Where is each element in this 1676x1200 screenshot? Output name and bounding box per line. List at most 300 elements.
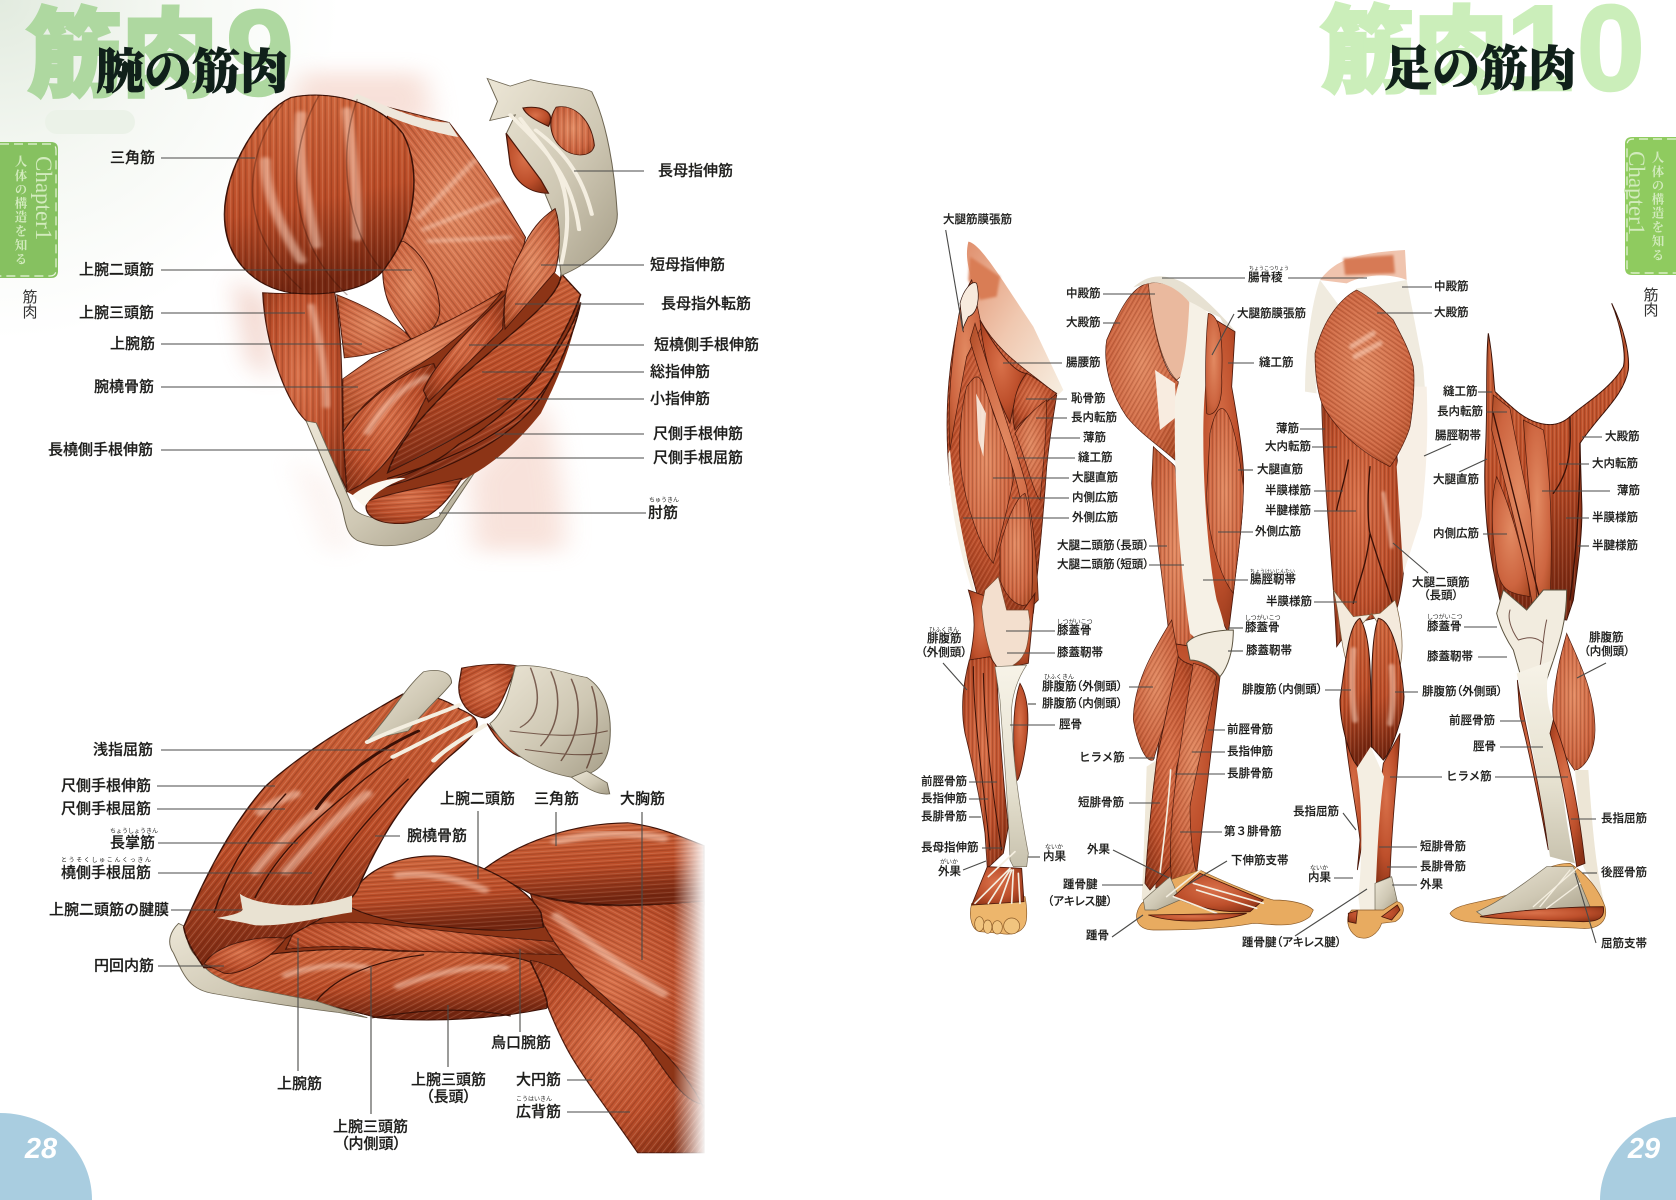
label 腓腹筋（外側頭） front: [921, 627, 967, 690]
label 半膜様筋 back: [1265, 483, 1343, 497]
page number 28: [0, 1113, 92, 1200]
label 内果 back: [1308, 865, 1353, 884]
label 膝蓋骨 front: しつがいこつ: [1057, 618, 1093, 626]
ankle and instep: [972, 852, 1024, 905]
label 長母指外転筋: 長母指外転筋: [661, 296, 751, 312]
label 長内転筋 inner: [1437, 404, 1507, 418]
label 中殿筋 back: 中殿筋: [1434, 279, 1468, 293]
label 膝蓋靭帯 front: [1007, 645, 1103, 659]
label 踵骨腱（アキレス腱）: （アキレス腱）: [1048, 894, 1112, 908]
extensor carpi radialis brevis: [423, 295, 505, 402]
label 円回内筋: [94, 958, 224, 974]
label 腸脛靭帯 side: ちょうけいじんたい: [1250, 569, 1295, 575]
shin muscles: [963, 657, 1008, 868]
label 短腓骨筋 back: 短腓骨筋: [1420, 839, 1466, 853]
label 短腓骨筋 side: 短腓骨筋: [1078, 795, 1124, 809]
deltoid: [485, 823, 704, 905]
illustration: leg side view: [1106, 276, 1313, 930]
label 肘筋: 肘筋: [648, 504, 678, 522]
label 半腱様筋 inner: [1578, 538, 1638, 552]
label 長腓骨筋 side: 長腓骨筋: [1227, 766, 1273, 780]
peroneal side: [1145, 657, 1200, 890]
label 脛骨 front: 脛骨: [1059, 718, 1082, 731]
label 長指伸筋 front: [921, 791, 988, 805]
pronator: [204, 937, 286, 974]
pectineus: [1013, 373, 1057, 430]
label 肘筋: [439, 497, 679, 522]
label 長内転筋: [1036, 410, 1117, 424]
fade to white at torso edge: [673, 816, 707, 1156]
label 恥骨筋: [1026, 391, 1106, 405]
label 上腕二頭筋 top: [440, 790, 515, 879]
label 大腿筋膜張筋 side: 大腿筋膜張筋: [1237, 306, 1306, 320]
title: 足の筋肉: 足の筋肉: [1384, 43, 1576, 96]
vastus lateralis side: [1207, 409, 1243, 593]
label 尺側手根伸筋: 尺側手根伸筋: [653, 426, 743, 442]
label 腓腹筋（外側頭） side: ひふくきん: [1044, 674, 1074, 681]
right chapter tab: Chapter1: [1624, 151, 1649, 235]
anconeus: [366, 478, 462, 524]
label 縫工筋 inner: 縫工筋: [1443, 384, 1478, 398]
fascia sheet: [967, 242, 1063, 397]
label 後脛骨筋: 後脛骨筋: [1601, 865, 1647, 879]
faint pill under heading: [45, 110, 135, 134]
label 長母指伸筋 front: [921, 840, 1003, 854]
label 大内転筋 inner: [1559, 456, 1638, 470]
label 踵骨腱（アキレス腱）: [1048, 877, 1143, 908]
label 縫工筋: 縫工筋: [1078, 450, 1112, 464]
foot sole muscle: [1480, 907, 1604, 922]
label 外果 front: 外果: [938, 864, 961, 878]
soleus right: [1375, 733, 1400, 883]
label 膝蓋骨 side: 膝蓋骨: [1245, 620, 1280, 634]
label 三角筋 top: [534, 790, 579, 846]
soleus left: [1345, 733, 1364, 870]
label 前脛骨筋 inner: 前脛骨筋: [1449, 713, 1495, 727]
label 長指伸筋 front: 長指伸筋: [921, 791, 967, 805]
label 上腕二頭筋の腱膜: 上腕二頭筋の腱膜: [49, 900, 169, 918]
label 踵骨腱（アキレス腱）: 踵骨腱: [1063, 877, 1098, 891]
label 大殿筋 inner: [1582, 429, 1640, 443]
label ヒラメ筋 side: ヒラメ筋: [1079, 750, 1125, 764]
gluteus maximus side: [1106, 283, 1178, 460]
label 内果 front: ないか: [1045, 844, 1063, 851]
label 外側広筋: 外側広筋: [1072, 510, 1118, 524]
label 大腿二頭筋（短頭）: 大腿二頭筋（短頭）: [1057, 557, 1149, 571]
hip upper: [1320, 250, 1407, 283]
toes: [975, 917, 1020, 934]
label 大腿直筋 inner: 大腿直筋: [1433, 472, 1479, 486]
tibialis anterior inner: [1517, 680, 1548, 850]
title: 腕の筋肉: 腕の筋肉: [96, 46, 288, 99]
right vertical section label: 筋肉: [1642, 287, 1658, 317]
label 腸腰筋: 腸腰筋: [1066, 355, 1100, 369]
label 大円筋: 大円筋: [516, 1072, 561, 1088]
label 長掌筋: ちょうしょうきん: [110, 828, 158, 835]
label 膝蓋骨 side: [1228, 614, 1281, 634]
left vertical section label: 筋肉: [20, 289, 38, 319]
label 大腿直筋 side: [1238, 462, 1303, 476]
label 腓腹筋（内側頭） front: 腓腹筋（内側頭）: [1042, 696, 1122, 710]
label 長腓骨筋 back: 長腓骨筋: [1420, 859, 1466, 873]
label 短母指伸筋: 短母指伸筋: [650, 256, 725, 274]
label 腸骨稜: [1162, 266, 1367, 284]
callouts: legs lower: [921, 613, 1647, 950]
thigh inner: [1485, 303, 1629, 620]
knee bone: [1187, 630, 1233, 677]
thumb abductor: [504, 209, 559, 329]
label 腸腰筋: [1003, 355, 1100, 369]
label 外果 front: [938, 858, 986, 878]
label 薄筋 back: [1276, 421, 1325, 435]
label 腸脛靭帯 side: [1203, 569, 1296, 586]
achilles back: [1357, 747, 1384, 910]
fist: [490, 666, 610, 777]
iliac crest: [1133, 276, 1235, 342]
tibia inner: [1517, 660, 1575, 863]
label 大腿直筋: 大腿直筋: [1072, 470, 1118, 484]
forearm base: [343, 272, 581, 503]
label 踵骨: 踵骨: [1086, 928, 1109, 942]
hand bones: [487, 78, 617, 276]
dorsal foot muscles: [1173, 873, 1263, 912]
foot tendons inner: [1533, 868, 1580, 908]
label 三角筋: 三角筋: [110, 150, 155, 166]
foot inner: [1450, 863, 1606, 929]
label 烏口腕筋: 烏口腕筋: [491, 1034, 551, 1052]
label 大殿筋 back: [1377, 305, 1468, 319]
label 上腕三頭筋（長頭）: [411, 1005, 486, 1106]
label 前脛骨筋 front: [921, 774, 997, 788]
label 長腓骨筋 front: [921, 809, 981, 823]
label 前脛骨筋 side: 前脛骨筋: [1227, 722, 1273, 736]
label 広背筋: こうはいきん: [516, 1096, 552, 1103]
label 短橈側手根伸筋: 短橈側手根伸筋: [654, 336, 759, 354]
label 上腕三頭筋（長頭）: （長頭）: [426, 1088, 471, 1106]
label 腓腹筋（外側頭） back: 腓腹筋（外側頭）: [1422, 684, 1502, 698]
label 上腕筋: 上腕筋: [277, 1076, 322, 1092]
callouts: arm top view: [48, 150, 759, 522]
right page header: big green heading 筋肉10: 筋肉: [1320, 0, 1508, 104]
gluteus medius side: [1148, 283, 1190, 380]
tibialis side: [1170, 663, 1217, 880]
knee inner: [1497, 590, 1567, 680]
sartorius: [970, 323, 1038, 607]
label 外果 front: がいか: [940, 858, 958, 866]
thigh base: [947, 280, 1057, 613]
label 浅指屈筋: 浅指屈筋: [93, 742, 153, 758]
heel muscle lumps: [1348, 905, 1400, 923]
label 大腿二頭筋（長頭） back: （長頭）: [1424, 589, 1458, 602]
label 腓腹筋（内側頭） inner: [1577, 630, 1630, 678]
label 大殿筋: [1066, 315, 1120, 329]
label 半膜様筋 lower: 半膜様筋: [1266, 594, 1312, 608]
label 腓腹筋（外側頭） side: [1042, 674, 1153, 693]
brachialis: [286, 922, 566, 955]
foot bones: [1477, 867, 1590, 917]
label 長掌筋: [110, 828, 298, 852]
label 大腿筋膜張筋: 大腿筋膜張筋: [943, 212, 1012, 226]
label 膝蓋骨 inner: [1427, 613, 1497, 633]
label 長指伸筋 side: 長指伸筋: [1227, 744, 1273, 758]
triceps: [263, 291, 347, 490]
label 踵骨腱（アキレス腱） back: [1242, 889, 1367, 949]
sartorius inner: [1492, 395, 1547, 610]
label 半膜様筋 inner: [1566, 510, 1638, 524]
left chapter tab: [0, 142, 58, 278]
label 屈筋支帯: [1575, 873, 1647, 950]
label 長指屈筋 back: [1293, 804, 1356, 830]
label 下伸筋支帯: [1187, 853, 1288, 885]
label 膝蓋骨 inner: 膝蓋骨: [1427, 619, 1462, 633]
label 大腿直筋 side: 大腿直筋: [1257, 462, 1303, 476]
left page header: big green heading 筋肉9: [26, 0, 294, 121]
knee side muscle right: [1013, 593, 1035, 667]
tibia: [995, 665, 1028, 867]
label 腓腹筋（内側頭） inner: （内側頭）: [1584, 644, 1630, 658]
illustration: arm bottom view: [170, 664, 707, 1156]
label 半膜様筋 inner: 半膜様筋: [1592, 510, 1638, 524]
label 内果 front: 内果: [1043, 849, 1066, 863]
label 上腕三頭筋（長頭）: 上腕三頭筋: [411, 1072, 486, 1088]
wrist tendons: [510, 115, 592, 264]
label 長母指伸筋 front: 長母指伸筋: [921, 840, 978, 854]
forearm tendons: [367, 705, 485, 761]
label 大腿二頭筋（長頭）: 大腿二頭筋（長頭）: [1057, 538, 1149, 552]
callouts: arm bottom view: [49, 742, 665, 1152]
deltoid: [224, 95, 414, 294]
label 腓腹筋（外側頭） back: [1395, 684, 1502, 698]
label 薄筋: 薄筋: [1083, 430, 1106, 444]
label 脛骨 inner: [1473, 740, 1543, 753]
calf medial: [1014, 683, 1028, 781]
label 膝蓋骨 front: [1006, 618, 1093, 637]
label 膝蓋靭帯 inner: 膝蓋靭帯: [1427, 649, 1473, 663]
callouts: legs upper: [943, 212, 1640, 608]
IT band: [1175, 302, 1228, 667]
label 上腕筋: 上腕筋: [110, 336, 155, 352]
label 中殿筋 back: [1402, 279, 1468, 293]
label 肘筋: ちゅうきん: [649, 497, 679, 504]
left page haze: [0, 0, 340, 340]
flexor inner: [1550, 720, 1585, 867]
label 中殿筋: [1066, 286, 1155, 300]
label ヒラメ筋 center: ヒラメ筋: [1446, 769, 1492, 783]
label 上腕三頭筋（内側頭）: [333, 966, 408, 1152]
gluteus maximus back: [1315, 290, 1414, 467]
calf left: [1340, 618, 1372, 767]
label 長指伸筋 side: [1192, 744, 1273, 758]
label 三角筋 top: 三角筋: [534, 790, 579, 808]
iliopsoas: [980, 320, 1027, 423]
clavicle: [352, 94, 458, 137]
hypothenar: [487, 724, 528, 759]
label 前脛骨筋 front: 前脛骨筋: [921, 774, 967, 788]
label 外側広筋 side: [1218, 524, 1301, 538]
label 半腱様筋 back: 半腱様筋: [1265, 503, 1311, 517]
brachioradialis: [343, 291, 503, 431]
front thigh base: [1200, 313, 1244, 633]
label 尺側手根屈筋: 尺側手根屈筋: [61, 800, 151, 818]
label 屈筋支帯: 屈筋支帯: [1601, 936, 1647, 950]
label 大腿直筋 inner: [1433, 459, 1487, 486]
right page header: big green heading 筋肉10: [1320, 0, 1648, 116]
label 長腓骨筋 front: 長腓骨筋: [921, 809, 967, 823]
adductor: [1015, 400, 1047, 500]
label 大内転筋 inner: 大内転筋: [1592, 456, 1638, 470]
label 上腕二頭筋: 上腕二頭筋: [79, 262, 154, 278]
label 縫工筋 side: 縫工筋: [1259, 355, 1294, 369]
label 円回内筋: 円回内筋: [94, 958, 154, 974]
label 大腿直筋: [993, 470, 1118, 484]
label 長内転筋: 長内転筋: [1071, 410, 1117, 424]
label 長腓骨筋 back: [1387, 859, 1466, 873]
page number 29: 29: [1627, 1133, 1660, 1165]
label 内側広筋: [1012, 490, 1118, 504]
label 腓腹筋（外側頭） front: ひふくきん: [929, 627, 959, 634]
extensor digitorum: [388, 274, 581, 473]
calf side: [1133, 620, 1178, 760]
biceps: [383, 241, 440, 339]
label 長掌筋: 長掌筋: [110, 834, 155, 852]
label 腸脛靭帯 back: [1424, 428, 1481, 456]
label 外側広筋 side: 外側広筋: [1255, 524, 1301, 538]
label 大内転筋 back: 大内転筋: [1265, 439, 1311, 453]
label 腓腹筋（内側頭） back: 腓腹筋（内側頭）: [1242, 682, 1322, 696]
label 大殿筋 back: 大殿筋: [1434, 305, 1468, 319]
knee side muscle left: [968, 590, 997, 673]
calf right: [1372, 618, 1404, 760]
ulna and elbow: [306, 421, 477, 546]
knee tendons: [1509, 610, 1547, 667]
bicipital aponeurosis: [217, 894, 352, 925]
label 長橈側手根伸筋: 長橈側手根伸筋: [48, 440, 153, 458]
illustration: leg inner view: [1450, 303, 1629, 929]
label 腓腹筋（内側頭） inner: 腓腹筋: [1589, 630, 1624, 644]
label 縫工筋: [1017, 450, 1112, 464]
extensor carpi radialis longus: [343, 364, 436, 492]
label 内側広筋: 内側広筋: [1072, 490, 1118, 504]
illustration: leg back view: [1305, 250, 1427, 938]
label 大腿筋膜張筋 side: [1212, 306, 1306, 355]
left chapter tab: 人体の構造を知る: [13, 155, 27, 266]
label 大腿二頭筋（短頭）: [1057, 557, 1184, 571]
label 腸骨稜: 腸骨稜: [1248, 270, 1283, 284]
label 外果 back: 外果: [1420, 877, 1443, 891]
label 大円筋: [516, 1072, 592, 1088]
label 腓腹筋（外側頭） side: 腓腹筋（外側頭）: [1042, 679, 1122, 693]
extensor digiti minimi and ulnaris: [375, 302, 581, 490]
elbow bone: [170, 923, 367, 1018]
iliotibial strip: [948, 450, 977, 600]
label 尺側手根伸筋: 尺側手根伸筋: [61, 778, 151, 794]
label 内側広筋 inner: 内側広筋: [1433, 526, 1479, 540]
TFL: [949, 280, 982, 450]
label 大胸筋: 大胸筋: [620, 790, 665, 808]
label 縫工筋 inner: [1443, 384, 1492, 398]
label 薄筋 back: 薄筋: [1276, 421, 1299, 435]
label 下伸筋支帯: 下伸筋支帯: [1231, 853, 1288, 867]
label 恥骨筋: 恥骨筋: [1071, 391, 1106, 405]
label 半腱様筋 back: [1265, 503, 1356, 517]
brachialis: [337, 295, 411, 358]
label 尺側手根屈筋: 尺側手根屈筋: [653, 450, 743, 466]
label 膝蓋靭帯 side: 膝蓋靭帯: [1246, 643, 1292, 657]
sole muscle: [1148, 913, 1247, 921]
label 広背筋: 広背筋: [516, 1102, 561, 1120]
vastus inner: [1492, 477, 1530, 597]
label 膝蓋靭帯 side: [1228, 643, 1292, 657]
label 大殿筋 inner: 大殿筋: [1605, 429, 1640, 443]
label 後脛骨筋: [1582, 865, 1647, 879]
label 上腕二頭筋 top: 上腕二頭筋: [440, 790, 515, 808]
label 橈側手根屈筋: とうそくしゅこんくっきん: [61, 857, 151, 864]
label 前脛骨筋 inner: [1449, 713, 1525, 727]
lat: [531, 960, 704, 1153]
label ヒラメ筋 side: [1079, 750, 1155, 764]
label 長指屈筋 inner: 長指屈筋: [1601, 811, 1647, 825]
calf inner: [1553, 633, 1595, 771]
label 踵骨腱（アキレス腱） back: 踵骨腱（アキレス腱）: [1242, 935, 1341, 949]
label 外果 side: [1087, 842, 1169, 878]
label 外果 side: 外果: [1087, 842, 1110, 856]
shin base: [1150, 643, 1220, 890]
label 脛骨 front: [1010, 718, 1082, 731]
label 中殿筋: 中殿筋: [1066, 286, 1100, 300]
vastus medialis: [1000, 493, 1033, 605]
label 橈側手根屈筋: [61, 857, 312, 882]
triceps: [204, 949, 547, 1020]
foot: [970, 897, 1027, 934]
label 長母指伸筋: 長母指伸筋: [658, 162, 733, 180]
label 膝蓋靭帯 front: 膝蓋靭帯: [1057, 645, 1103, 659]
pectoral: [531, 894, 704, 1108]
biceps: [347, 856, 543, 930]
label 前脛骨筋 side: [1208, 722, 1273, 736]
rectus: [960, 377, 1013, 563]
label 内果 front: [1028, 844, 1066, 863]
page number 29: [1600, 1117, 1676, 1200]
right chapter tab: 人体の構造を知る: [1650, 151, 1664, 262]
wrist muscle: [506, 133, 548, 193]
label 長指屈筋 inner: [1571, 811, 1647, 825]
torso background: [235, 73, 564, 551]
chest and arm base: [204, 894, 704, 1153]
label 大腿二頭筋（長頭） back: 大腿二頭筋: [1412, 575, 1470, 589]
label 内果 back: ないか: [1310, 865, 1328, 872]
label 腓腹筋（外側頭） front: 腓腹筋: [927, 631, 962, 645]
label 腕橈骨筋: 腕橈骨筋: [94, 378, 154, 396]
hamstrings side: [1152, 447, 1200, 673]
hand muscle 2: [523, 107, 550, 126]
heel bone: [1143, 877, 1180, 910]
label 腓腹筋（内側頭） back: [1242, 682, 1351, 696]
foot tendons: [1167, 870, 1263, 913]
white patch: [1155, 370, 1177, 430]
label 膝蓋骨 front: 膝蓋骨: [1057, 623, 1092, 637]
label 外果 back: [1392, 877, 1443, 891]
label 短腓骨筋 side: [1078, 795, 1160, 809]
label 脛骨 inner: 脛骨: [1473, 740, 1496, 753]
ankle bones back: [1375, 877, 1397, 912]
foot side: [1137, 870, 1313, 930]
label 半膜様筋 back: 半膜様筋: [1265, 483, 1311, 497]
label 薄筋 inner: [1542, 483, 1640, 497]
label 腕橈骨筋: 腕橈骨筋: [407, 826, 467, 844]
label 大腿二頭筋（長頭） back: [1393, 543, 1470, 602]
label 短腓骨筋 back: [1379, 839, 1466, 853]
label 腸骨稜: ちょうこつりょう: [1249, 266, 1289, 272]
